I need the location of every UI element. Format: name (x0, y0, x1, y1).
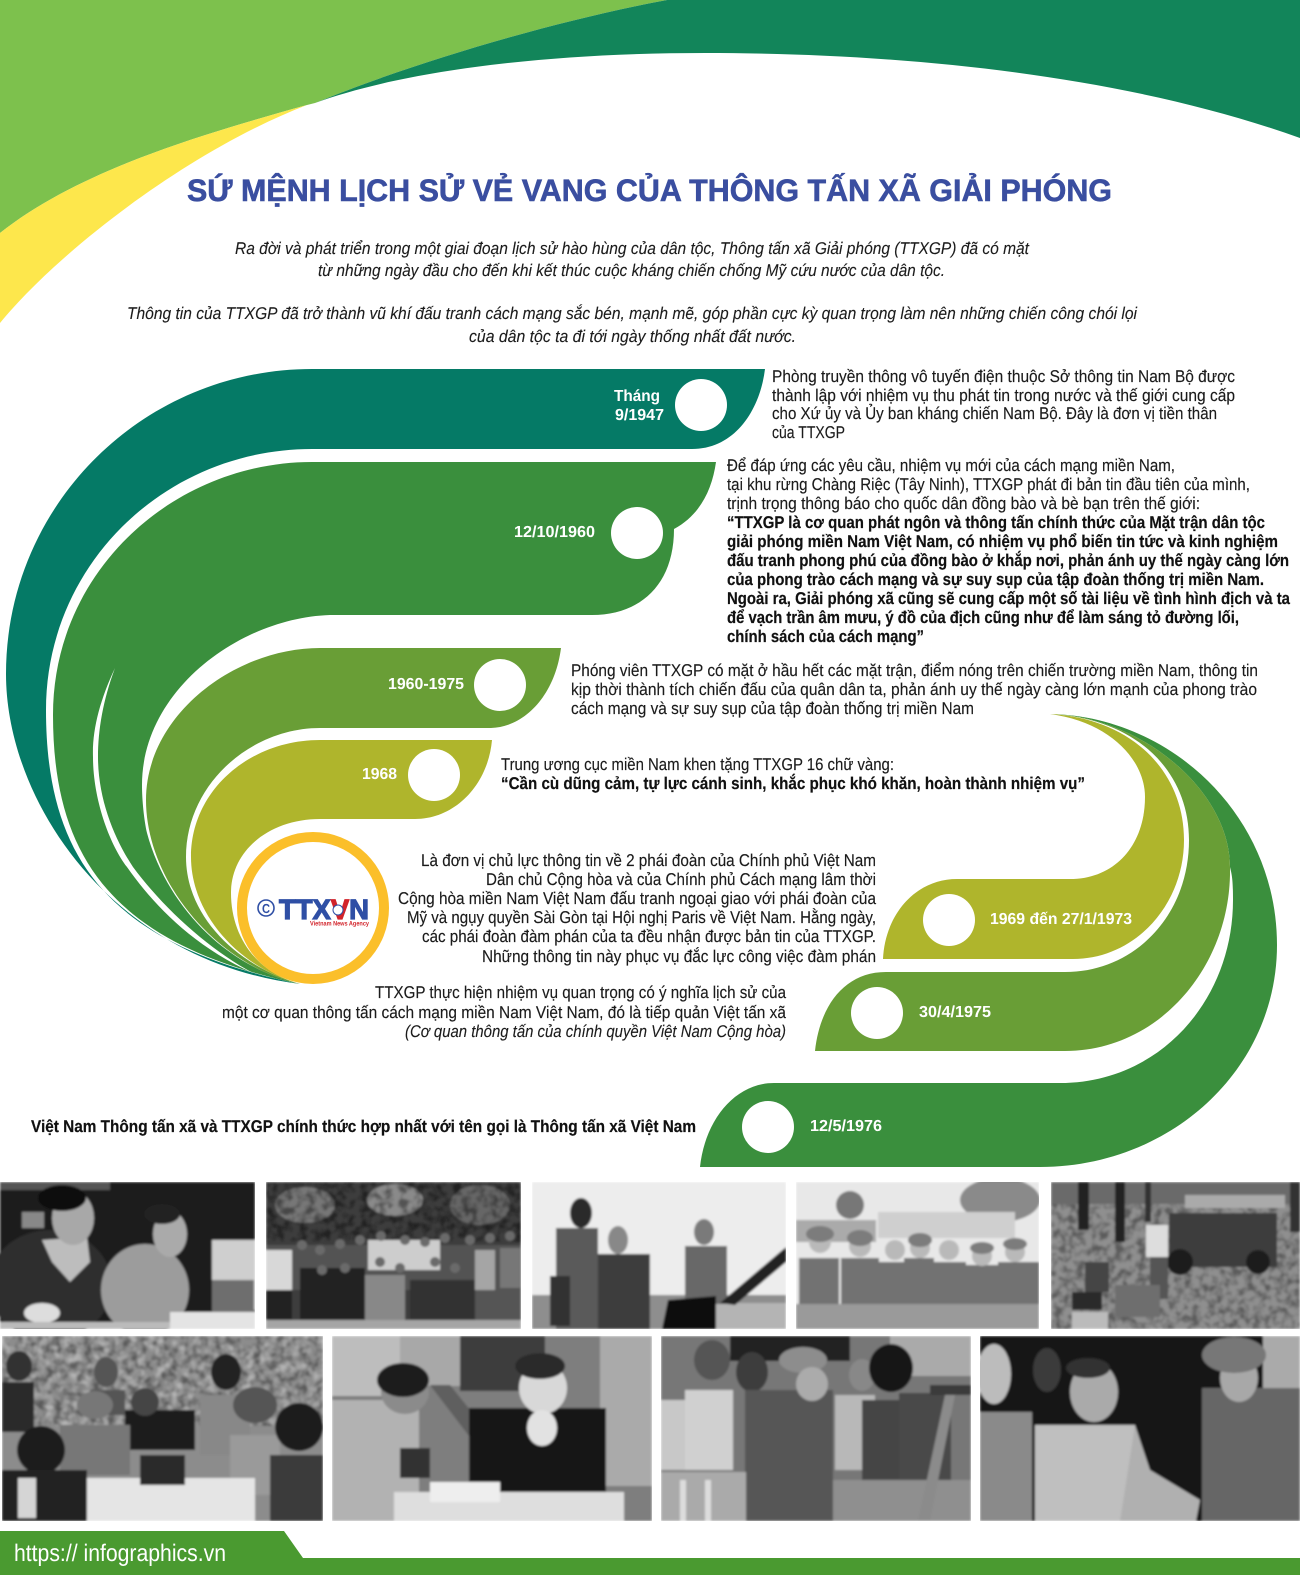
photo: reporters with camera (332, 1336, 652, 1521)
text: 12/10/1960: Để đáp ứng các yêu cầu, nhiệm vụ mới của cách mạng miền Nam, (727, 456, 1175, 475)
text: 1969 đến 27/1/1973 (398, 851, 876, 966)
text: 1969 đến 27/1/1973: Những thông tin này phục vụ đắc lực công việc đàm phán (482, 947, 876, 966)
text: 12/10/1960: trịnh trọng thông báo cho quốc dân đồng bào và bè bạn trên thế giới: (727, 494, 1200, 513)
intro text: từ những ngày đầu cho đến khi kết thúc cuộc kháng chiến chống Mỹ cứu nước của dân tộc. (318, 261, 945, 280)
text: 1960-1975 (571, 661, 1258, 718)
intro text: của dân tộc ta đi tới ngày thống nhất đất nước. (469, 327, 796, 346)
text: 12/10/1960: để vạch trần âm mưu, ý đồ của địch cũng như để làm sáng tỏ đường lối, (727, 608, 1239, 627)
photo: group in forest (266, 1182, 521, 1329)
ribbon: 12/5/1976 (700, 714, 1277, 1167)
text: 9/1947: cho Xứ ủy và Ủy ban kháng chiến Nam Bộ. Đây là đơn vị tiền thân (772, 403, 1217, 423)
text: 9/1947: Phòng truyền thông vô tuyến điện thuộc Sở thông tin Nam Bộ được (772, 367, 1235, 386)
text: 1968: Trung ương cục miền Nam khen tặng TTXGP 16 chữ vàng: (501, 755, 894, 774)
text: 30/4/1975 (222, 983, 786, 1041)
text: 1968: “Cần cù dũng cảm, tự lực cánh sinh, khắc phục khó khăn, hoàn thành nhiệm vụ” (501, 773, 1085, 793)
ribbon: Tháng 9/1947 (6, 369, 765, 984)
footer bar (0, 1531, 1300, 1575)
photo: jeep in rubber forest (1051, 1182, 1300, 1329)
left timeline ribbons (6, 369, 765, 984)
logo globe (333, 905, 343, 915)
logo copyright mark (258, 900, 274, 916)
text: 30/4/1975: TTXGP thực hiện nhiệm vụ quan trọng có ý nghĩa lịch sử của (375, 983, 786, 1002)
photo: reporter in crowd (661, 1336, 971, 1521)
photo: radio operators (0, 1182, 255, 1340)
footer url: https:// infographics.vn (14, 1540, 226, 1567)
logo wordmark: TTXVN (279, 894, 369, 925)
photo: reporters with soldiers (532, 1182, 786, 1329)
text: 1969 đến 27/1/1973: Cộng hòa miền Nam Việt Nam đấu tranh ngoại giao với phái đoàn của (398, 889, 876, 908)
logo copyright mark: C (262, 901, 271, 916)
text: 9/1947 (772, 367, 1235, 442)
right timeline ribbons (700, 714, 1277, 1167)
title: SỨ MỆNH LỊCH SỬ VẺ VANG CỦA THÔNG TẤN XÃ GIẢI PHÓNG (187, 173, 1112, 208)
date labels: Tháng (614, 388, 660, 405)
photo: reporter with elderly woman (977, 1336, 1300, 1521)
ribbon: 1960-1975 (146, 648, 561, 984)
text: 1968 (501, 755, 1085, 793)
text: 30/4/1975: (Cơ quan thông tấn của chính quyền Việt Nam Cộng hòa) (405, 1022, 786, 1041)
text: 9/1947: thành lập với nhiệm vụ thu phát tin trong nước và thế giới cung cấp (772, 386, 1235, 405)
header: curved colour bands (0, 0, 1300, 323)
text: 12/5/1976: Việt Nam Thông tấn xã và TTXGP chính thức hợp nhất với tên gọi là Thông tấn xã Việt Nam (31, 1117, 696, 1136)
intro text: Thông tin của TTXGP đã trở thành vũ khí đấu tranh cách mạng sắc bén, mạnh mẽ, góp phần cực kỳ quan trọng làm nên những chiến công chói lọi (127, 304, 1138, 323)
text: 1969 đến 27/1/1973: Dân chủ Cộng hòa và của Chính phủ Cách mạng lâm thời (486, 870, 876, 889)
logo agency name: Vietnam News Agency (310, 920, 369, 928)
text: 12/10/1960 (727, 456, 1290, 646)
band: light green (0, 0, 667, 233)
text: 1960-1975: kịp thời thành tích chiến đấu của quân dân ta, phản ánh uy thế ngày càng lớn mạnh của phong trào (571, 680, 1257, 699)
date labels: 1968 (362, 766, 397, 783)
intro text: Ra đời và phát triển trong một giai đoạn lịch sử hào hùng của dân tộc, Thông tấn xã Giải phóng (TTXGP) đã có mặt (235, 239, 1030, 258)
date labels: 12/10/1960 (514, 524, 595, 541)
ribbon: 12/10/1960 (53, 462, 716, 984)
ribbon: 30/4/1975 (815, 714, 1230, 1051)
intro text (127, 239, 1138, 346)
date labels: 30/4/1975 (919, 1004, 991, 1021)
date labels: 9/1947 (615, 407, 664, 424)
text: 1969 đến 27/1/1973: Là đơn vị chủ lực thông tin về 2 phái đoàn của Chính phủ Việt Nam (421, 851, 876, 870)
photo: reporters around table (2, 1336, 323, 1521)
text: 12/10/1960: tại khu rừng Chàng Riệc (Tây Ninh), TTXGP phát đi bản tin đầu tiên của mình, (727, 475, 1250, 494)
band: yellow (0, 105, 307, 323)
date labels: 12/5/1976 (810, 1118, 882, 1135)
date labels: 1960-1975 (388, 676, 464, 693)
text: 1960-1975: cách mạng và sự suy sụp của tập đoàn thống trị miền Nam (571, 699, 974, 718)
date labels (362, 388, 1132, 1135)
ribbon sliver (93, 668, 253, 973)
text: 1969 đến 27/1/1973: các phái đoàn đàm phán của ta đều nhận được bản tin của TTXGP. (422, 927, 876, 946)
logo: TTXVN in gold ring (242, 837, 384, 979)
band: dark green (315, 0, 1300, 138)
text: 12/10/1960: chính sách của cách mạng” (727, 627, 924, 646)
text: 1969 đến 27/1/1973: Mỹ và ngụy quyền Sài Gòn tại Hội nghị Paris về Việt Nam. Hằng ngày, (407, 908, 876, 927)
text: 9/1947: của TTXGP (772, 423, 845, 442)
text: 30/4/1975: một cơ quan thông tấn cách mạng miền Nam Việt Nam, đó là tiếp quản Việt tấn xã (222, 1003, 786, 1022)
photo: group of seven reporters (796, 1178, 1040, 1329)
ribbon: 1968 (191, 740, 492, 984)
ribbon: 1969 đến 27/1/1973 (883, 714, 1184, 959)
timeline circles (408, 379, 975, 1153)
logo ring (242, 837, 384, 979)
date labels: 1969 đến 27/1/1973 (990, 911, 1132, 928)
